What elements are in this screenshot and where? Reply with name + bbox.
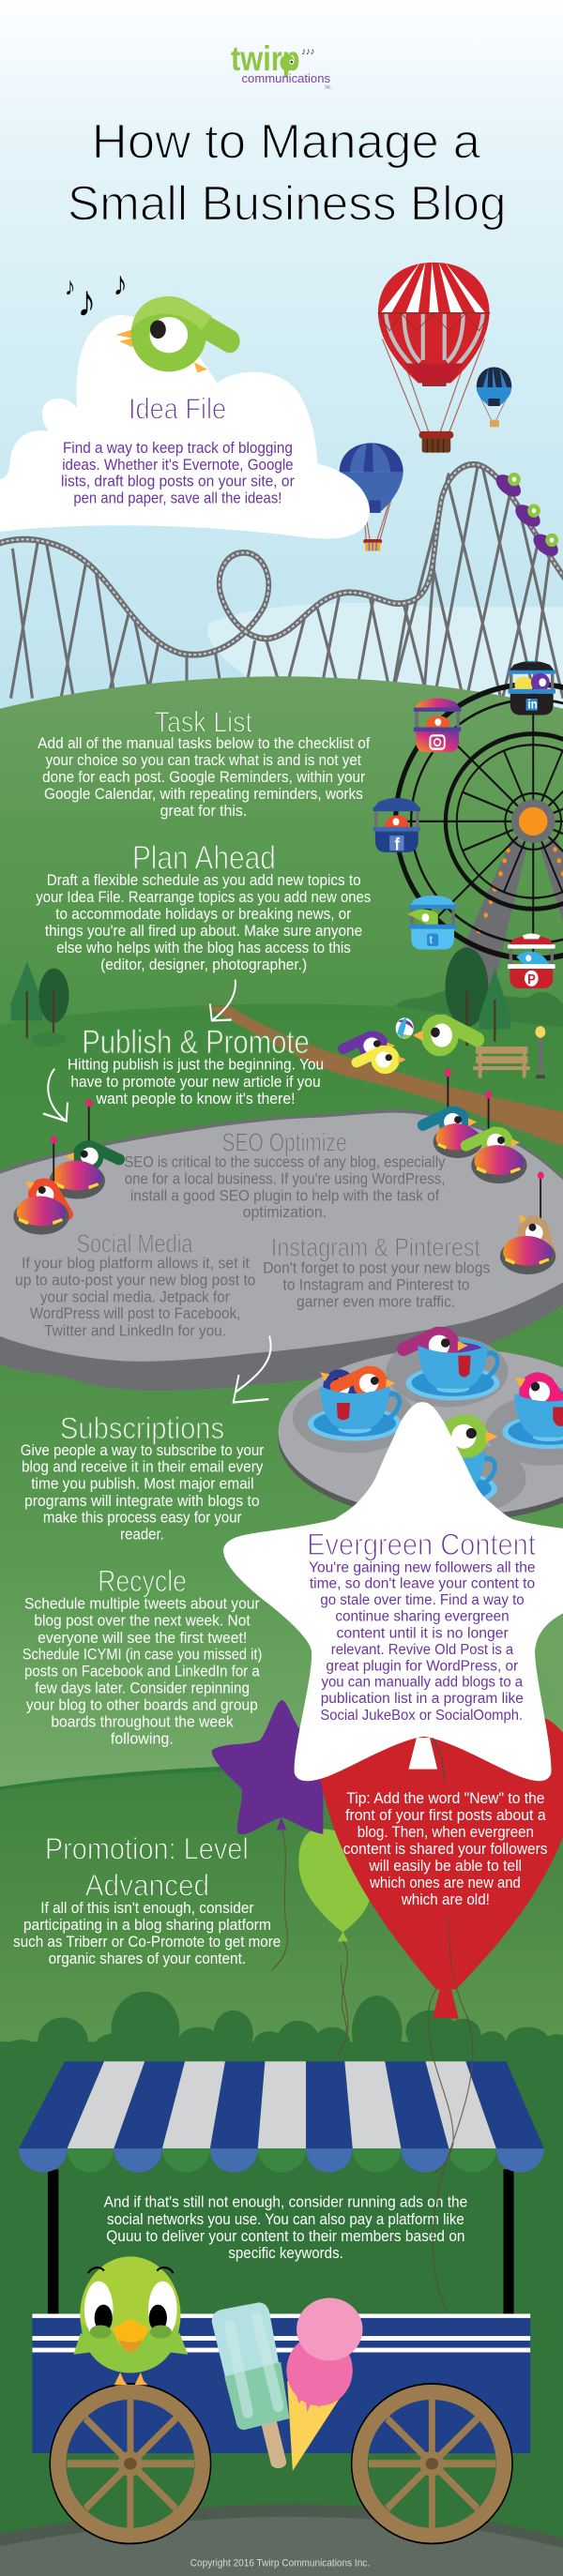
text: Promotion body: organic shares of your content. xyxy=(49,1951,246,1967)
cloud: Idea File panel xyxy=(0,315,370,539)
text: Tip on red balloon: will easily be able to tell xyxy=(368,1858,522,1875)
text: Publish & Promote body: want people to know it's there! xyxy=(96,1091,296,1107)
text: Recycle body: following. xyxy=(111,1730,174,1748)
icon: music notes: ♪ xyxy=(114,266,128,303)
heading: Publish & Promote: Publish & Promote xyxy=(82,1024,310,1060)
heading: Evergreen Content: Evergreen Content xyxy=(307,1529,537,1562)
text: Idea File body: Find a way to keep track of blogging xyxy=(63,440,293,457)
text: Social Media body xyxy=(15,1256,255,1340)
bird: big green playing xyxy=(413,1015,478,1056)
text: Instagram & Pinterest body: to Instagram and Pinterest to xyxy=(283,1276,470,1294)
text: Subscriptions body: programs will integrate with blogs to xyxy=(24,1493,260,1510)
gondola: LinkedIn xyxy=(508,661,555,716)
road xyxy=(0,2505,563,2576)
text: Subscriptions body: time you publish. Most major email xyxy=(31,1476,254,1493)
text: Tip on red balloon: Tip: Add the word "New" to the xyxy=(346,1790,544,1808)
text: Evergreen Content body: time, so don't leave your content to xyxy=(310,1576,535,1592)
text: Idea File body xyxy=(61,440,295,507)
green hill: Publish and Subscriptions background xyxy=(0,1004,563,1796)
text: Plan Ahead body: to accommodate holidays or breaking news, or xyxy=(55,906,351,923)
text: Evergreen Content body: You're gaining new followers all the xyxy=(309,1559,536,1576)
text: Subscriptions body: blog and receive it in their email every xyxy=(22,1459,264,1476)
text: Publish & Promote body xyxy=(68,1057,324,1107)
bird: purple xyxy=(343,1032,395,1061)
text: Publish & Promote body: have to promote your new article if you xyxy=(70,1074,321,1091)
copyright: Copyright 2016 Twirp Communications Inc. xyxy=(190,2558,370,2569)
dirt path xyxy=(205,1006,563,1146)
text: Tip on red balloon: which ones are new and xyxy=(369,1875,521,1891)
icon: popsicle xyxy=(212,2302,289,2468)
text: Subscriptions body xyxy=(21,1442,264,1544)
text: Plan Ahead body xyxy=(36,872,372,973)
sky background xyxy=(0,0,563,713)
heading: Subscriptions: Subscriptions xyxy=(60,1412,224,1445)
logo: Twirp Communications: ♪♪♪ xyxy=(301,46,314,57)
text: Subscriptions body: make this process easy for your xyxy=(43,1510,242,1527)
cart awning xyxy=(19,2061,544,2173)
icon: music notes xyxy=(65,266,128,326)
heading: Recycle: Recycle xyxy=(98,1565,187,1598)
arrow: to bumper cars xyxy=(43,1069,68,1122)
heading: Plan Ahead: Plan Ahead xyxy=(132,839,276,876)
bumper car: dark green bird xyxy=(50,1099,119,1199)
red balloon knot over ground xyxy=(433,1992,458,2018)
text: Recycle body: Schedule multiple tweets about your xyxy=(24,1596,260,1613)
bird: yellow xyxy=(357,1046,406,1074)
text: ads paragraph: social networks you use. You can also pay a platform like xyxy=(107,2211,464,2228)
text: SEO Optimize body xyxy=(124,1154,446,1222)
text: Evergreen Content body: relevant. Revive Old Post is a xyxy=(331,1642,514,1658)
text: Publish & Promote body: Hitting publish is just the beginning. You xyxy=(68,1057,324,1074)
tea cup: magenta bird xyxy=(403,1327,500,1400)
text: Tip on red balloon: blog. Then, when evergreen xyxy=(358,1824,534,1841)
gondola: Pinterest: P xyxy=(527,971,536,987)
text: ads paragraph: specific keywords. xyxy=(228,2245,343,2262)
wagon wheel: left xyxy=(49,2383,211,2544)
text: Evergreen Content body: publication list in a program like xyxy=(321,1691,524,1707)
logo: Twirp Communications xyxy=(231,39,332,91)
text: Recycle body: few days later. Consider repinning xyxy=(35,1680,250,1697)
lamp post xyxy=(536,1026,545,1078)
balloon string over bushes xyxy=(336,1965,348,2057)
roller coaster track xyxy=(0,464,563,655)
balloon: purple star xyxy=(212,1700,323,1970)
arrow: to Publish and Promote xyxy=(210,980,236,1020)
icon: green bird mascot xyxy=(115,296,230,372)
text: Recycle body: boards throughout the week xyxy=(51,1714,234,1731)
gondola: LinkedIn: in xyxy=(527,698,538,712)
text: Evergreen Content body xyxy=(309,1559,536,1724)
gondola: Twitter xyxy=(407,896,456,950)
tea cup: green bird xyxy=(403,1414,497,1506)
hot air balloon: blue medium xyxy=(340,443,403,551)
bumper car: red bird xyxy=(13,1137,79,1235)
text: ads paragraph xyxy=(104,2194,467,2262)
heading: Promotion: Level Advanced xyxy=(45,1833,249,1903)
text: Plan Ahead body: else who helps with the blog has access to this xyxy=(56,940,351,957)
text: Task List body: Google Calendar, with repeating reminders, works xyxy=(44,786,363,804)
text: Plan Ahead body: Draft a flexible schedule as you add new topics to xyxy=(47,872,361,889)
gondola: Facebook: f xyxy=(395,835,400,854)
text: Task List body: your choice so you can track what is and is not yet xyxy=(46,752,362,769)
green hill: Promotion background xyxy=(0,1764,563,2067)
roller coaster supports xyxy=(10,467,563,699)
title: Small Business Blog xyxy=(68,176,507,231)
icon: ice cream cone xyxy=(286,2297,362,2471)
gondola: Instagram xyxy=(414,699,461,752)
heading: Idea File: Idea File xyxy=(129,394,226,426)
tea cup ride platform xyxy=(279,1336,563,1522)
bushes and dark ground xyxy=(0,1992,563,2576)
text: Social Media body: If your blog platform allows it, set it xyxy=(22,1256,251,1273)
hot air balloon: red large xyxy=(378,263,490,453)
text: ads paragraph: Quuu to deliver your content to their members based on xyxy=(106,2228,465,2245)
gondola: Facebook xyxy=(373,798,420,854)
text: Tip on red balloon: which are old! xyxy=(401,1891,490,1908)
title xyxy=(68,115,507,231)
text: Evergreen Content body: continue sharing evergreen xyxy=(335,1609,510,1625)
text: Evergreen Content body: you can manually add blogs to a xyxy=(321,1675,524,1691)
pale background cloud xyxy=(207,603,563,712)
text: Evergreen Content body: content until it is no longer xyxy=(337,1626,509,1642)
text: SEO Optimize body: one for a local business. If you're using WordPress, xyxy=(125,1171,445,1188)
text: Social Media body: up to auto-post your new blog post to xyxy=(15,1273,255,1289)
wagon wheel: right xyxy=(351,2383,513,2544)
text: Tip on red balloon: front of your first posts about a xyxy=(345,1807,546,1824)
heading: Social Media: Social Media xyxy=(77,1230,193,1258)
bumper car: teal bird xyxy=(423,1069,482,1158)
title: How to Manage a xyxy=(92,115,480,170)
hot air balloon: blue small xyxy=(477,368,511,427)
text: Tip on red balloon xyxy=(343,1790,548,1908)
text: Evergreen Content body: go stale over time. Find a way to xyxy=(320,1592,525,1608)
text: Idea File body: lists, draft blog posts on your site, or xyxy=(61,474,295,490)
bumper car: tan bird xyxy=(500,1172,563,1274)
cart body xyxy=(32,2313,530,2453)
text: Recycle body: your blog to other boards and group xyxy=(26,1697,258,1714)
text: Social Media body: your social media. Jetpack for xyxy=(40,1288,230,1306)
balloon strings xyxy=(428,1738,475,2332)
text: Instagram & Pinterest body: Don't forget to post your new blogs xyxy=(263,1260,491,1277)
bumper car: green bird xyxy=(466,1091,527,1183)
text: Task List body xyxy=(38,735,371,820)
text: SEO Optimize body: install a good SEO plugin to help with the task of xyxy=(130,1187,440,1205)
text: Idea File body: ideas. Whether it's Evernote, Google xyxy=(62,457,294,474)
text: Promotion body: participating in a blog sharing platform xyxy=(23,1917,271,1934)
text: Task List body: done for each post. Google Reminders, within your xyxy=(42,769,365,786)
text: Recycle body xyxy=(23,1596,262,1748)
text: Idea File body: pen and paper, save all the ideas! xyxy=(73,490,282,507)
text: Task List body: Add all of the manual tasks below to the checklist of xyxy=(38,735,371,753)
bench xyxy=(473,1047,530,1078)
logo: Twirp Communications: twirp xyxy=(231,39,300,79)
logo: Twirp Communications: Inc. xyxy=(325,84,332,91)
text: Tip on red balloon: content is shared your followers xyxy=(343,1841,548,1859)
text: Plan Ahead body: things you're all fired up about. Make sure anyone xyxy=(45,923,362,941)
heading: SEO Optimize: SEO Optimize xyxy=(221,1129,347,1157)
star balloon: Evergreen Content panel xyxy=(223,1402,563,1782)
icon: music notes: ♪ xyxy=(65,273,75,301)
bird: front-facing mascot xyxy=(73,2256,188,2385)
balloon string in front of awning xyxy=(429,2016,473,2335)
text: Plan Ahead body: (editor, designer, photographer.) xyxy=(100,957,307,973)
bumper car arena xyxy=(0,1109,563,1391)
text: Subscriptions body: Give people a way to subscribe to your xyxy=(21,1442,264,1459)
trees right xyxy=(445,947,510,1046)
text: Evergreen Content body: great plugin for WordPress, or xyxy=(326,1658,518,1675)
text: Promotion body: such as Triberr or Co-Promote to get more xyxy=(13,1934,281,1951)
green hill: Task List background xyxy=(0,676,563,1072)
balloon: lime green xyxy=(298,1829,373,2056)
coaster cars with birds xyxy=(493,470,561,561)
heading: Instagram & Pinterest: Instagram & Pinterest xyxy=(271,1234,480,1262)
text: Recycle body: everyone will see the first tweet! xyxy=(38,1630,247,1647)
text: Task List body: great for this. xyxy=(160,803,247,820)
cart posts xyxy=(48,2169,514,2313)
icon: music notes: ♪ xyxy=(77,277,96,326)
text: SEO Optimize body: optimization. xyxy=(243,1204,327,1222)
text: Social Media body: Twitter and LinkedIn for you. xyxy=(44,1323,226,1340)
text: SEO Optimize body: SEO is critical to the success of any blog, especially xyxy=(124,1154,446,1171)
gondola: Twitter: t xyxy=(430,935,433,946)
heading: Promotion: Level Advanced: Promotion: Level xyxy=(45,1833,249,1866)
logo: Twirp Communications: communications xyxy=(242,72,330,85)
heading: Task List: Task List xyxy=(155,707,252,739)
heading: Promotion: Level Advanced: Advanced xyxy=(85,1870,209,1903)
tea cup: pink bird xyxy=(502,1362,563,1449)
gondola: Pinterest xyxy=(508,934,555,988)
arrow: to Subscriptions xyxy=(234,1336,271,1403)
text: Recycle body: blog post over the next week. Not xyxy=(34,1613,251,1630)
text: Instagram & Pinterest body xyxy=(263,1260,491,1311)
text: Promotion body: If all of this isn't enough, consider xyxy=(40,1900,254,1917)
text: Social Media body: WordPress will post to Facebook, xyxy=(30,1305,240,1323)
balloon: red heart xyxy=(320,1715,563,2019)
beach ball xyxy=(396,1017,414,1039)
text: Promotion body xyxy=(13,1900,281,1967)
text: ads paragraph: And if that's still not enough, consider running ads on the xyxy=(104,2194,467,2211)
text: Recycle body: posts on Facebook and LinkedIn for a xyxy=(24,1664,260,1680)
ferris wheel xyxy=(395,684,563,1033)
text: Evergreen Content body: Social JukeBox or SocialOomph. xyxy=(320,1708,523,1724)
text: Subscriptions body: reader. xyxy=(120,1527,164,1544)
bushes right xyxy=(395,991,563,1027)
trees left xyxy=(10,961,68,1047)
text: Instagram & Pinterest body: garner even more traffic. xyxy=(297,1293,455,1311)
tea cup: blue and orange birds xyxy=(308,1359,402,1441)
text: Recycle body: Schedule ICYMI (in case you missed it) xyxy=(23,1647,262,1664)
text: Plan Ahead body: your Idea File. Rearrange topics as you add new ones xyxy=(36,889,372,906)
